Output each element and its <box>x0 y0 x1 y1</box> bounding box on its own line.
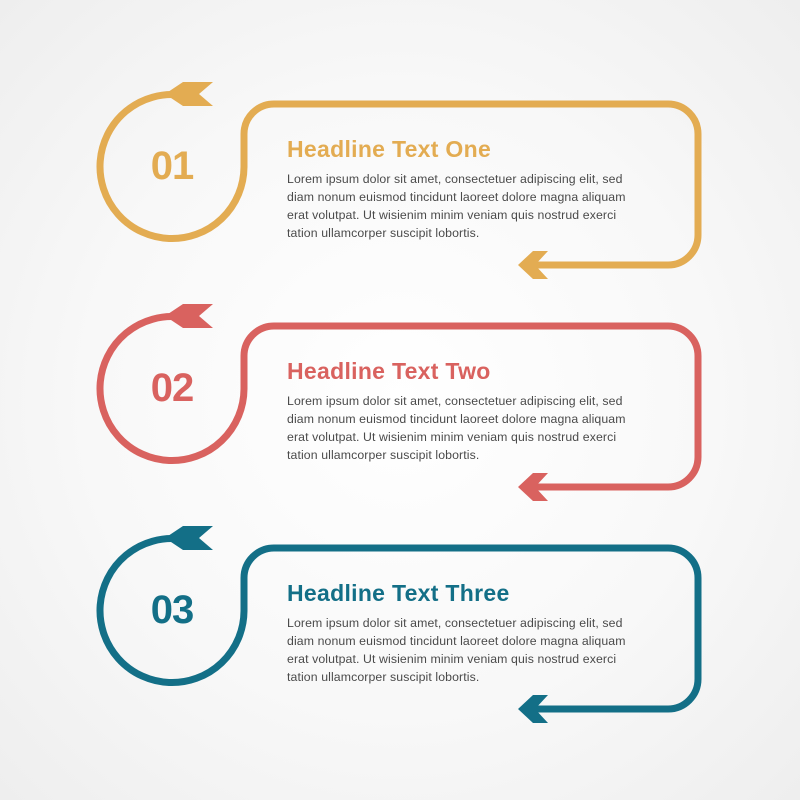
body text 3 <box>287 616 626 684</box>
step 1 <box>96 82 702 279</box>
headline 3: Headline Text Three <box>287 580 510 606</box>
body text 3: erat volutpat. Ut wisienim minim veniam quis nostrud exerci <box>287 652 616 666</box>
number 01: 01 <box>151 144 193 188</box>
body text 1: erat volutpat. Ut wisienim minim veniam quis nostrud exerci <box>287 208 616 222</box>
body text 3: diam nonum euismod tincidunt laoreet dolore magna aliquam <box>287 634 626 648</box>
body text 2: diam nonum euismod tincidunt laoreet dolore magna aliquam <box>287 412 626 426</box>
number 02: 02 <box>151 366 193 410</box>
body text 1: diam nonum euismod tincidunt laoreet dolore magna aliquam <box>287 190 626 204</box>
body text 1 <box>287 172 626 240</box>
body text 1: Lorem ipsum dolor sit amet, consectetuer adipiscing elit, sed <box>287 172 623 186</box>
body text 2: erat volutpat. Ut wisienim minim veniam quis nostrud exerci <box>287 430 616 444</box>
step 2 <box>96 304 702 501</box>
connector frame 2 <box>96 304 702 501</box>
connector frame 3 <box>96 526 702 723</box>
step 3 <box>96 526 702 723</box>
body text 2: tation ullamcorper suscipit lobortis. <box>287 448 479 462</box>
body text 3: tation ullamcorper suscipit lobortis. <box>287 670 479 684</box>
headline 1: Headline Text One <box>287 136 491 162</box>
connector frame 1 <box>96 82 702 279</box>
body text 2 <box>287 394 626 462</box>
number 03: 03 <box>151 588 193 632</box>
body text 2: Lorem ipsum dolor sit amet, consectetuer adipiscing elit, sed <box>287 394 623 408</box>
headline 2: Headline Text Two <box>287 358 491 384</box>
body text 1: tation ullamcorper suscipit lobortis. <box>287 226 479 240</box>
body text 3: Lorem ipsum dolor sit amet, consectetuer adipiscing elit, sed <box>287 616 623 630</box>
